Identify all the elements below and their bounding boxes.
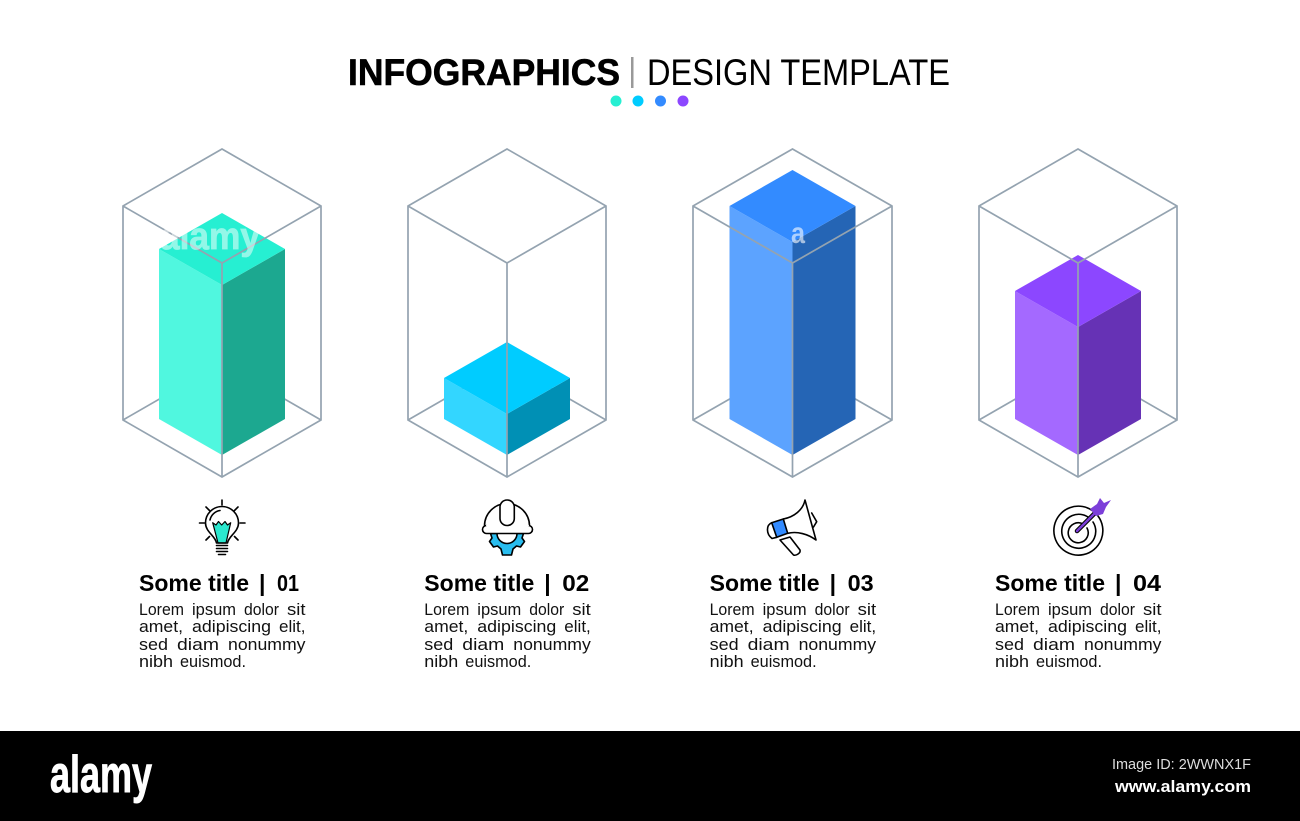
text block: column 04: ipsum	[1048, 601, 1092, 619]
text block: column 03: nonummy	[799, 636, 877, 654]
text block: column 01: sed	[139, 636, 168, 654]
title	[348, 52, 950, 93]
text block: column 02: diam	[462, 636, 504, 654]
text block: column 02: adipiscing	[477, 618, 556, 636]
text block: column 04: nibh	[995, 653, 1029, 671]
text block: column 03: nibh	[710, 653, 744, 671]
text block: column 04: diam	[1033, 636, 1075, 654]
text block: column 04: |	[1115, 570, 1121, 596]
text block: column 02: Lorem	[424, 601, 469, 619]
text block: column 03: amet,	[710, 618, 754, 636]
footer bar	[0, 731, 1300, 821]
icon: megaphone	[767, 500, 817, 555]
chart: isometric bar 01	[123, 149, 321, 477]
icon: helmet and gear	[482, 500, 532, 555]
text block: column 01: Lorem	[139, 601, 184, 619]
chart: isometric bar 01: alamy	[160, 216, 260, 258]
text block: column 02: ipsum	[477, 601, 521, 619]
text block: column 04: 04	[1133, 570, 1161, 596]
text block: column 03: euismod.	[751, 653, 817, 671]
text block: column 02: sed	[424, 636, 453, 654]
text block: column 03: elit,	[850, 618, 876, 636]
text block: column 03: dolor	[815, 601, 850, 619]
text block: column 02: 02	[562, 570, 589, 596]
text block: column 03: Lorem	[710, 601, 755, 619]
text block: column 01: diam	[177, 636, 219, 654]
text block: column 04: dolor	[1100, 601, 1135, 619]
text block: column 04: Lorem	[995, 601, 1040, 619]
text block: column 04: Some title	[995, 570, 1105, 596]
text block: column 03: diam	[748, 636, 790, 654]
chart: isometric bar 04	[979, 149, 1177, 477]
text block: column 02: sit	[572, 601, 591, 619]
text block: column 02	[424, 570, 592, 671]
text block: column 02: Some title	[424, 570, 534, 596]
text block: column 03	[710, 570, 877, 671]
text block: column 03: Some title	[710, 570, 820, 596]
text block: column 04: adipiscing	[1048, 618, 1127, 636]
title: INFOGRAPHICS	[348, 52, 620, 93]
title: DESIGN TEMPLATE	[647, 52, 950, 93]
chart: isometric bar 03	[693, 149, 892, 477]
footer bar: alamy	[50, 746, 152, 804]
chart: isometric bar 02	[408, 149, 606, 477]
text block: column 01: sit	[287, 601, 306, 619]
text block: column 02: nonummy	[513, 636, 592, 654]
text block: column 04: elit,	[1135, 618, 1162, 636]
text block: column 03: sit	[858, 601, 877, 619]
text block: column 01: 01	[277, 570, 299, 596]
text block: column 02: nibh	[424, 653, 458, 671]
text block: column 02: amet,	[424, 618, 468, 636]
text block: column 02: |	[544, 570, 551, 596]
icon: target with arrow	[1054, 498, 1111, 555]
text block: column 04: sit	[1143, 601, 1162, 619]
text block: column 01: |	[259, 570, 265, 596]
text block: column 01: nonummy	[228, 636, 306, 654]
text block: column 01: dolor	[244, 601, 279, 619]
text block: column 01: ipsum	[192, 601, 236, 619]
text block: column 01: elit,	[279, 618, 306, 636]
text block: column 03: sed	[710, 636, 739, 654]
footer bar: www.alamy.com	[1114, 778, 1251, 796]
text block: column 01: adipiscing	[192, 618, 271, 636]
text block: column 01: euismod.	[180, 653, 246, 671]
text block: column 01: nibh	[139, 653, 173, 671]
text block: column 04	[995, 570, 1162, 671]
text block: column 03: adipiscing	[763, 618, 842, 636]
text block: column 04: euismod.	[1036, 653, 1102, 671]
text block: column 01	[139, 570, 306, 671]
text block: column 04: sed	[995, 636, 1024, 654]
text block: column 02: elit,	[564, 618, 591, 636]
text block: column 04: amet,	[995, 618, 1039, 636]
text block: column 03: |	[830, 570, 836, 596]
text block: column 01: Some title	[139, 570, 249, 596]
text block: column 03: 03	[848, 570, 874, 596]
text block: column 01: amet,	[139, 618, 183, 636]
title dots	[610, 96, 688, 106]
icon: light bulb	[200, 500, 245, 554]
text block: column 04: nonummy	[1084, 636, 1162, 654]
chart: isometric bar 03: a	[791, 217, 805, 250]
footer bar: Image ID: 2WWNX1F	[1112, 756, 1251, 773]
text block: column 02: euismod.	[465, 653, 531, 671]
text block: column 02: dolor	[529, 601, 565, 619]
text block: column 03: ipsum	[763, 601, 807, 619]
